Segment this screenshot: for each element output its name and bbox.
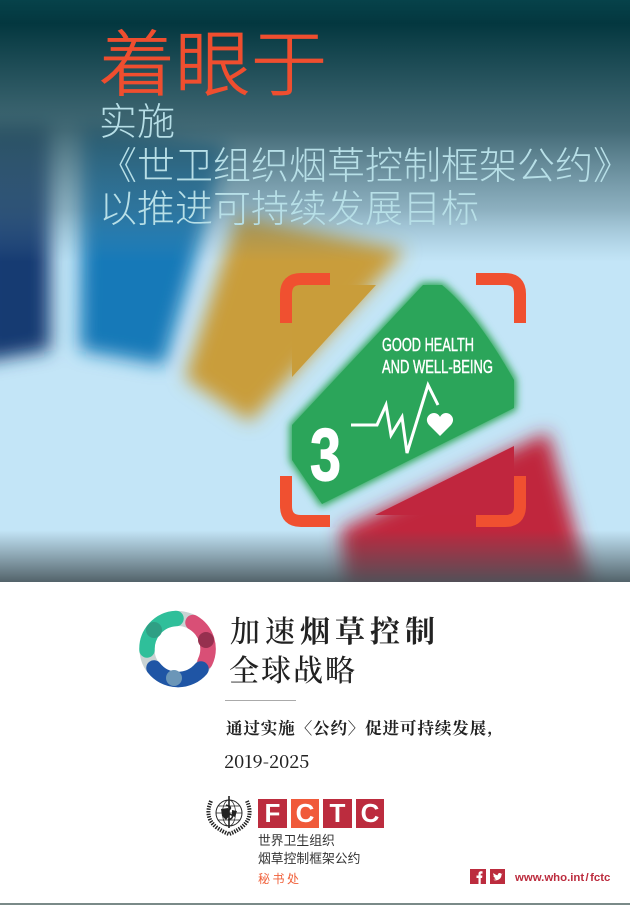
SDG heading: AND WELL-BEING [382,357,493,377]
SDG heading [382,335,493,377]
title: subtitle text [99,102,630,231]
secretariat label: 秘书处 [258,872,302,886]
T tile [323,799,352,828]
heading: strategy title line 2: 全球战略 [229,646,357,690]
blurred SDG wheel segments [0,125,600,620]
title: subtitle text: 以推进可持续发展目标 [99,189,479,231]
F tile [258,799,287,828]
bottom rule [0,903,630,905]
C tile: C [361,798,379,828]
bottom dark gradient [0,530,630,582]
SDG number: 3 [310,413,341,496]
website link text: www.who.int / fctc [515,872,610,884]
icon: heartbeat line [351,385,438,453]
focus frame brackets [286,279,520,521]
top dark gradient [0,0,630,262]
icon: twitter [490,869,505,884]
title: subtitle text: 《世卫组织烟草控制框架公约》 [99,146,630,188]
C tile [291,799,319,828]
FCTC organisation name: 烟草控制框架公约 [258,851,360,866]
subtitle: strategy description: 通过实施〈公约〉促进可持续发展, [226,715,493,739]
sharp wheel segments inside the focus frame [292,285,514,515]
logo: strategy ring [139,610,216,688]
FCTC logo letters [258,798,384,828]
FCTC organisation name [258,833,360,866]
title: red heading: 着眼于 [99,25,327,106]
heading: strategy title line 1: 加速烟草控制 [230,607,440,651]
green SDG 3 segment glow [292,285,514,504]
C tile: C [296,798,314,828]
green SDG 3 segment [292,285,514,504]
hero image panel [0,0,630,582]
SDG heading: GOOD HEALTH [382,335,474,355]
icon: WHO emblem [206,796,252,836]
F tile: F [265,798,280,828]
icon: heart [427,413,453,436]
date range: 2019-2025 [224,749,309,774]
C tile [356,799,384,828]
T tile: T [330,798,345,828]
icon: facebook [470,869,486,884]
FCTC organisation name: 世界卫生组织 [258,833,335,848]
divider rule [225,700,296,701]
title: subtitle text: 实施 [99,102,175,144]
